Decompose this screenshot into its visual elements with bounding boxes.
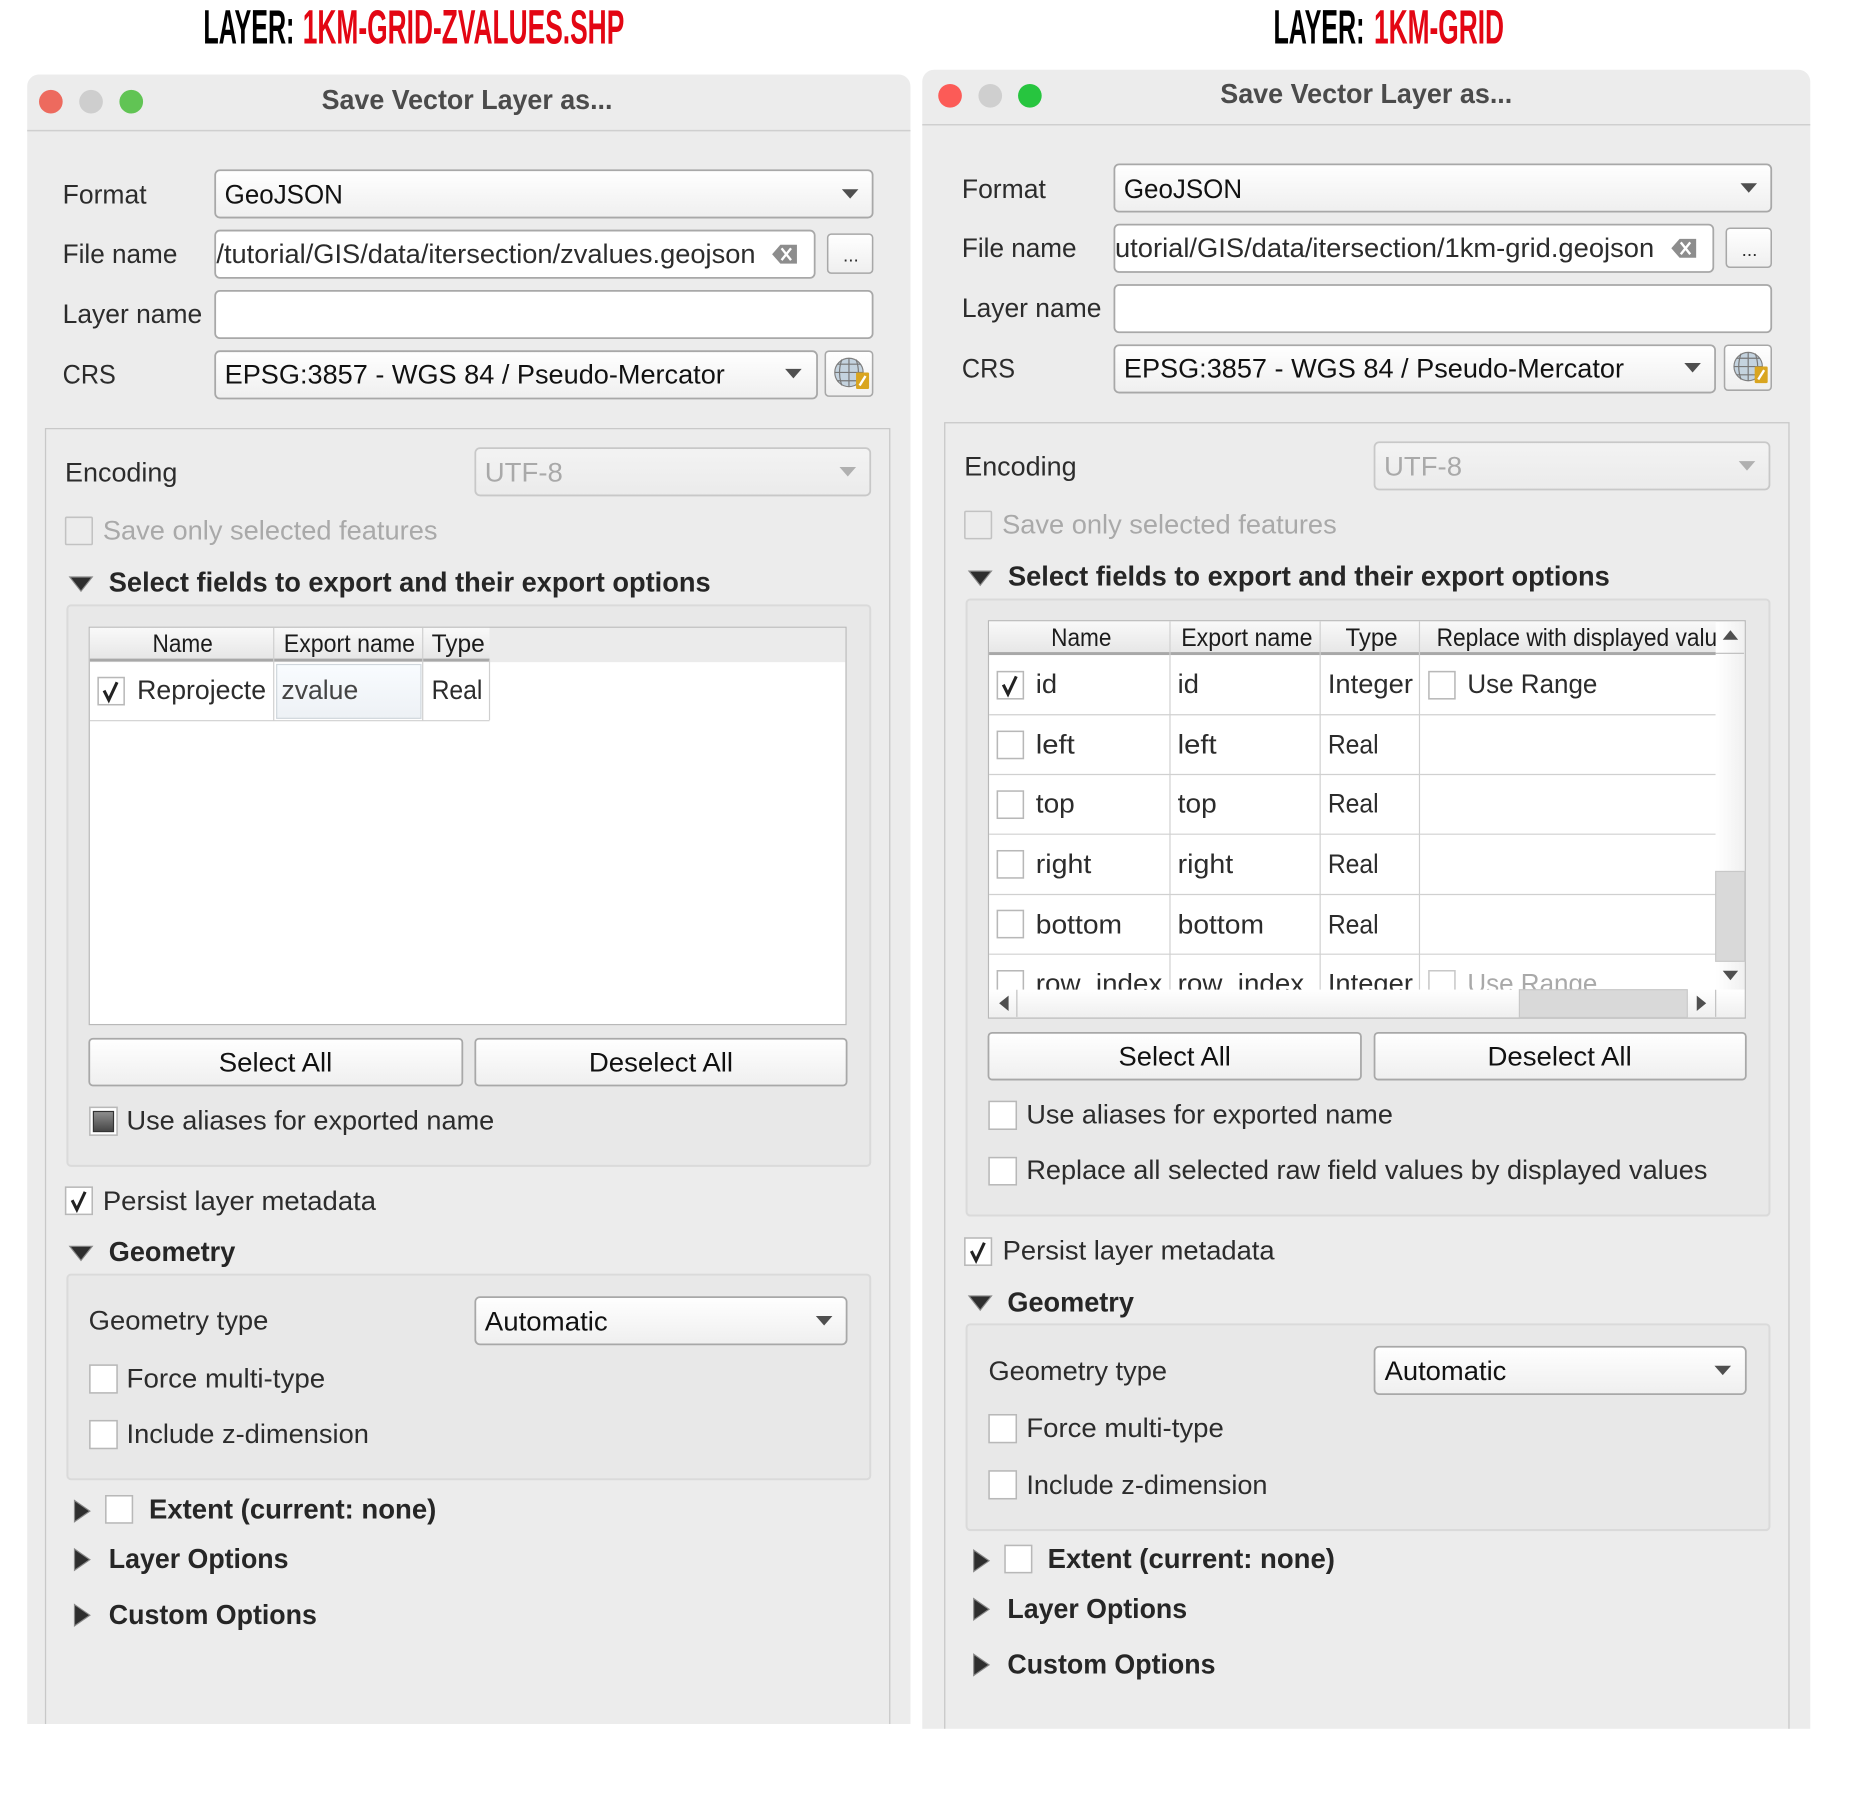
encoding row: UTF-8 bbox=[1384, 451, 1462, 482]
panel: left geometry group: Automatic bbox=[485, 1306, 608, 1337]
encoding row: UTF-8 bbox=[485, 457, 563, 488]
row: row_index, clipped bbox=[996, 970, 1596, 990]
CRS row: CRS bbox=[962, 353, 1015, 384]
row: right: right bbox=[1036, 848, 1092, 879]
row: right bbox=[997, 848, 1379, 879]
button: deselect all: Deselect All bbox=[1487, 1041, 1632, 1072]
button: deselect all bbox=[1375, 1033, 1746, 1080]
button: select all bbox=[89, 1039, 462, 1085]
button: select all bbox=[988, 1033, 1361, 1080]
panel: right geometry group: Include z-dimension bbox=[1026, 1469, 1268, 1500]
table: left fields: Export name bbox=[284, 631, 415, 658]
section heading: layer options: Layer Options bbox=[109, 1543, 289, 1574]
table: left fields: Reprojecte bbox=[137, 674, 266, 705]
row: left bbox=[997, 729, 1379, 760]
format row bbox=[962, 164, 1771, 212]
row: row_index, clipped: Use Range bbox=[1467, 967, 1597, 998]
panel: left geometry group: Force multi-type bbox=[127, 1362, 325, 1393]
table: right fields: Type bbox=[1346, 625, 1398, 652]
table: left fields: Type bbox=[432, 631, 485, 658]
section heading: extent: Extent (current: none) bbox=[1048, 1543, 1335, 1574]
row: id bbox=[997, 668, 1597, 699]
layer name row bbox=[63, 291, 873, 338]
encoding row: Encoding bbox=[964, 451, 1077, 482]
row: left: Real bbox=[1328, 729, 1379, 760]
heading: left layer title: LAYER: bbox=[203, 1, 294, 55]
panel: right geometry group: Geometry type bbox=[988, 1355, 1167, 1386]
panel: left geometry group bbox=[67, 1275, 870, 1479]
button: deselect all bbox=[475, 1039, 847, 1085]
table: right fields: Name bbox=[1051, 625, 1111, 652]
panel: left fields group bbox=[67, 605, 870, 1166]
row: top: top bbox=[1178, 788, 1217, 819]
heading: left layer title: 1KM-GRID-ZVALUES.SHP bbox=[303, 1, 624, 55]
file name row: ... bbox=[843, 246, 859, 267]
encoding row: Encoding bbox=[65, 457, 177, 488]
option: persist layer metadata: Persist layer metadata bbox=[1003, 1235, 1276, 1266]
icon: window traffic lights bbox=[938, 84, 1042, 108]
panel: right geometry group bbox=[967, 1324, 1769, 1530]
layer name row: Layer name bbox=[63, 298, 202, 329]
table: left fields: zvalue bbox=[281, 674, 358, 705]
panel: right geometry group: Automatic bbox=[1385, 1355, 1506, 1386]
file name row bbox=[63, 231, 873, 278]
CRS row bbox=[63, 351, 873, 398]
CRS row: EPSG:3857 - WGS 84 / Pseudo-Mercator bbox=[1124, 353, 1624, 384]
row: bottom: bottom bbox=[1178, 908, 1264, 939]
section heading: custom options: Custom Options bbox=[1007, 1648, 1216, 1679]
section heading: geometry: Geometry bbox=[1007, 1287, 1134, 1318]
row: row_index, clipped: row_index bbox=[1036, 967, 1163, 998]
row: bottom bbox=[997, 908, 1379, 939]
icon: CRS globe bbox=[1734, 352, 1768, 383]
table: right fields bbox=[988, 621, 1745, 1018]
table: left fields bbox=[89, 627, 846, 1025]
row: right: right bbox=[1178, 848, 1234, 879]
encoding row bbox=[65, 448, 870, 495]
panel: right geometry group: Force multi-type bbox=[1026, 1412, 1224, 1443]
option: use aliases: Use aliases for exported name bbox=[1026, 1099, 1393, 1130]
icon: CRS globe bbox=[835, 358, 869, 389]
row: row_index, clipped: row_index bbox=[1178, 967, 1305, 998]
file name row: /tutorial/GIS/data/itersection/zvalues.geojson bbox=[216, 238, 756, 269]
row: id: id bbox=[1036, 668, 1057, 699]
section heading: select fields: Select fields to export and their export options bbox=[1008, 561, 1610, 592]
vertical scrollbar bbox=[1716, 622, 1745, 990]
row: bottom: bottom bbox=[1036, 908, 1122, 939]
heading: right layer title: LAYER: bbox=[1273, 1, 1364, 55]
row: top: Real bbox=[1328, 788, 1379, 819]
panel: left geometry group: Include z-dimension bbox=[127, 1418, 369, 1449]
encoding row bbox=[964, 442, 1769, 490]
file name row: File name bbox=[63, 238, 177, 269]
panel: right fields group bbox=[967, 599, 1769, 1216]
disabled option: save only selected: Save only selected features bbox=[103, 515, 437, 546]
disabled option: save only selected: Save only selected features bbox=[1002, 509, 1337, 540]
heading: left layer title bbox=[203, 1, 624, 55]
table: right fields: Replace with displayed value bbox=[1437, 625, 1730, 652]
option: replace raw values: Replace all selected raw field values by displayed values bbox=[1026, 1154, 1707, 1185]
file name row: File name bbox=[962, 232, 1077, 263]
row: bottom: Real bbox=[1328, 908, 1379, 939]
section heading: select fields: Select fields to export and their export options bbox=[109, 567, 711, 598]
row: left: left bbox=[1178, 729, 1217, 760]
file name row: utorial/GIS/data/itersection/1km-grid.geojson bbox=[1115, 232, 1654, 263]
panel: right save dialog bbox=[922, 70, 1810, 1729]
layer name row: Layer name bbox=[962, 292, 1101, 323]
row: top bbox=[997, 788, 1379, 819]
layer name row bbox=[962, 285, 1771, 332]
row: right: Real bbox=[1328, 848, 1379, 879]
format row: GeoJSON bbox=[225, 179, 343, 210]
format row: Format bbox=[962, 173, 1046, 204]
table: left fields: Real bbox=[432, 674, 482, 705]
button: deselect all: Deselect All bbox=[589, 1047, 733, 1078]
section heading: geometry: Geometry bbox=[109, 1236, 236, 1267]
format row: GeoJSON bbox=[1124, 173, 1242, 204]
heading: right layer title: 1KM-GRID bbox=[1374, 1, 1504, 55]
row: top: top bbox=[1036, 788, 1075, 819]
button: select all: Select All bbox=[219, 1047, 332, 1078]
row: id: Integer bbox=[1328, 668, 1413, 699]
row: id: Use Range bbox=[1467, 668, 1597, 699]
option: persist layer metadata: Persist layer metadata bbox=[103, 1185, 377, 1216]
table: left fields: Name bbox=[153, 631, 213, 658]
row: id: id bbox=[1178, 668, 1199, 699]
window title: Save Vector Layer as... bbox=[322, 84, 612, 115]
panel: left geometry group: Geometry type bbox=[89, 1304, 268, 1335]
CRS row: CRS bbox=[63, 358, 116, 389]
row: left: left bbox=[1036, 729, 1075, 760]
file name row: ... bbox=[1742, 240, 1757, 261]
horizontal scrollbar bbox=[989, 990, 1745, 1017]
table: right fields: Export name bbox=[1181, 625, 1312, 652]
file name row bbox=[962, 225, 1771, 272]
icon: window traffic lights bbox=[39, 90, 143, 114]
format row bbox=[63, 170, 873, 218]
section heading: custom options: Custom Options bbox=[109, 1599, 317, 1630]
section heading: extent: Extent (current: none) bbox=[149, 1494, 436, 1525]
section heading: layer options: Layer Options bbox=[1007, 1593, 1187, 1624]
button: select all: Select All bbox=[1119, 1041, 1231, 1072]
row: row_index, clipped: Integer bbox=[1328, 967, 1413, 998]
CRS row: EPSG:3857 - WGS 84 / Pseudo-Mercator bbox=[225, 358, 725, 389]
option: use aliases, mixed state: Use aliases for exported name bbox=[127, 1105, 494, 1136]
panel: left save dialog bbox=[27, 74, 910, 1724]
window title: Save Vector Layer as... bbox=[1220, 78, 1512, 109]
format row: Format bbox=[63, 179, 147, 210]
CRS row bbox=[962, 345, 1771, 393]
